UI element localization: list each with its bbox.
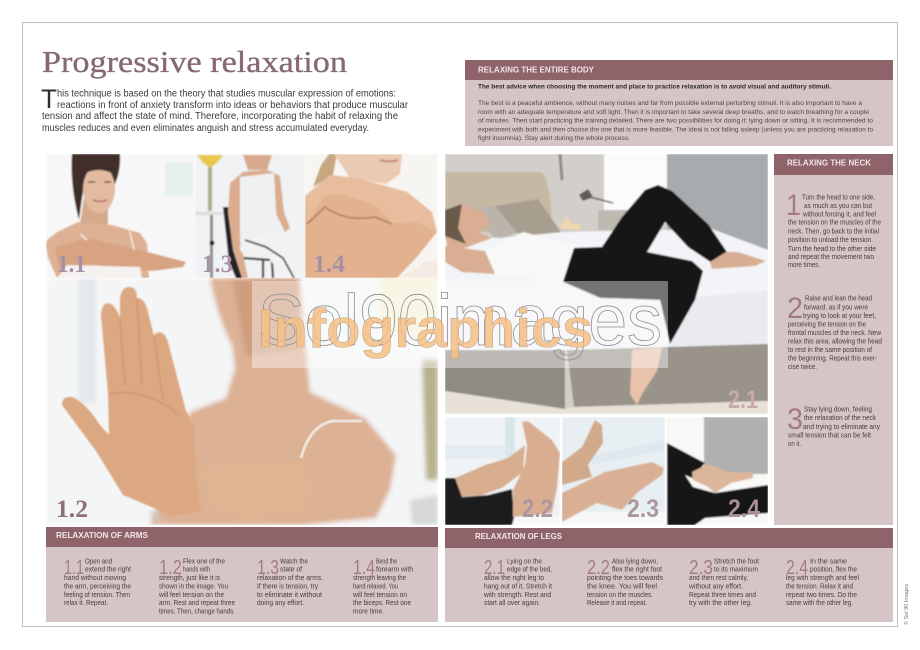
watermark: Infographics	[258, 297, 593, 359]
step 2.1: hang out of it. Stretch it	[484, 582, 552, 590]
step 1	[786, 189, 881, 269]
step 3	[787, 403, 880, 448]
label 2.1: 2.1	[728, 386, 758, 414]
step 1.1: 1.1	[64, 557, 84, 579]
step 2.1: Lying on the	[507, 556, 542, 566]
step 2.1: allow the right leg to	[484, 573, 544, 582]
intro text: T	[41, 84, 57, 114]
step 2: perceiving the tension on the	[788, 320, 866, 328]
step 2.3: without any effort.	[688, 582, 743, 590]
label 1.1: 1.1	[57, 251, 86, 278]
step 1.2	[158, 556, 235, 616]
step 1.3: Watch the	[280, 556, 308, 566]
step 1.3: doing any effort.	[257, 598, 304, 607]
step 1: position to unload the tension.	[788, 235, 873, 244]
step 2	[787, 292, 882, 371]
label 2.3: 2.3	[627, 495, 659, 523]
step 2.1: start all over again.	[484, 598, 540, 607]
step 2.2: the knee. You will feel	[587, 582, 657, 590]
step 2: 2	[787, 292, 803, 325]
step 1.4: more time.	[353, 606, 384, 616]
step 2.4: same with the other leg.	[786, 598, 853, 607]
step 2.1: edge of the bed,	[507, 565, 552, 574]
step 1.2: times. Then, change hands.	[159, 606, 235, 616]
step 1.1: extend the right	[85, 565, 131, 574]
intro text: reactions in front of anxiety transform into ideas or behaviors that produce muscular	[57, 100, 409, 111]
photo 1.2: hand held toward the camera	[46, 278, 438, 525]
step 2.2: tension on the muscles.	[587, 590, 653, 599]
intro text: muscles reduces and even eliminates anguish and stress accumulated everyday.	[42, 123, 369, 134]
credit: © Sol 90 Images	[903, 583, 910, 625]
step 1.3: relaxation of the arms.	[257, 573, 323, 582]
step 1.4: the biceps. Rest one	[353, 598, 411, 607]
panel: relaxing the neck	[774, 154, 893, 525]
step 2.2	[587, 556, 663, 607]
heading: neck: RELAXING THE NECK	[787, 158, 872, 168]
panel: relaxing the entire body	[465, 60, 893, 146]
heading: legs: RELAXATION OF LEGS	[475, 531, 562, 541]
body text: The best is a peaceful ambience, without many noises and far from possible external perturbing stimuli. It is also important to have a	[478, 100, 862, 107]
step 3: the relaxation of the neck	[804, 413, 876, 422]
step 2.4: In the same	[810, 556, 847, 566]
step 1.2: Flex one of the	[183, 556, 225, 566]
step 1.1: Open and	[85, 556, 112, 566]
step 2.3	[688, 556, 759, 607]
step 3: on it.	[788, 439, 801, 448]
step 2: the beginning. Repeat this exer-	[788, 354, 878, 362]
step 2: relax this area, allowing the head	[788, 336, 882, 346]
step 2.4: 2.4	[786, 557, 808, 579]
title: Progressive relaxation	[42, 44, 348, 79]
step 1: neck. Then, go back to the initial	[788, 226, 879, 235]
step 1.3: state of	[280, 565, 302, 574]
step 1: as much as you can but	[804, 201, 872, 210]
step 2.4: position, flex the	[810, 565, 857, 574]
step 2.1: 2.1	[484, 557, 505, 579]
step 1.4: forearm with	[376, 565, 413, 574]
body text: room with an adequate temperature and soft light. Then it is important to take several deep breaths, and to watch breathing for a couple	[478, 109, 869, 116]
step 1: more times.	[788, 260, 820, 269]
step 2.4	[786, 556, 859, 607]
step 2.2: flex the right foot	[612, 565, 662, 574]
strap	[301, 421, 362, 458]
step 3: small tension that can be felt	[788, 430, 871, 440]
heading: entire body: RELAXING THE ENTIRE BODY	[478, 64, 594, 74]
step 2.4: the tension. Relax it and	[786, 582, 853, 590]
step 2.1	[483, 556, 552, 607]
intro text: tension and affect the state of mind. Therefore, incorporating the habit of relaxing the	[42, 111, 398, 122]
step 1: and repeat the movement two	[788, 252, 874, 261]
step 1.4: Bend the	[376, 556, 397, 566]
heading: arms: RELAXATION OF ARMS	[56, 530, 148, 540]
step 1.4: 1.4	[353, 557, 375, 579]
photo 1.1: woman extending arm	[46, 154, 195, 278]
step 3: Stay lying down, feeling	[804, 404, 872, 414]
photo 2.3: foot stretched	[562, 417, 665, 525]
photo 1.3: woman seated	[195, 154, 305, 278]
watermark: Sol90images	[258, 281, 662, 361]
body text: fight insomnia). Stay alert during the whole process.	[478, 135, 630, 142]
step 2.3: to its maximum	[714, 565, 758, 574]
step 1.3: to eliminate it without	[257, 590, 322, 599]
step 1.1: relax it. Repeat.	[64, 598, 108, 607]
step 2.4: leg with strength and feel	[786, 573, 859, 582]
step 2.3: and then rest calmly,	[689, 573, 748, 582]
intro text: his technique is based on the theory that studies muscular expression of emotions:	[57, 89, 396, 100]
step 1.3: If there is tension, try	[257, 582, 318, 590]
step 2.2: Release it and repeat.	[587, 598, 647, 607]
photo 1.4: flexed arm	[305, 154, 438, 278]
step 3: 3	[787, 403, 803, 436]
intro text	[41, 84, 409, 134]
step 1: Turn the head to one side,	[802, 192, 875, 202]
step 2.2: Also lying down,	[612, 556, 658, 566]
step 1: without forcing it, and feel	[802, 210, 876, 218]
step 1: the tension on the muscles of the	[788, 218, 881, 227]
step 2: cise twice.	[788, 362, 817, 371]
body text: experiment with both and then choose the one that is more feasible. The ideal is not falling asleep (unless you are practicing relaxation to	[478, 126, 873, 134]
step 1.3	[257, 556, 323, 607]
step 2.3: try with the other leg.	[689, 598, 752, 607]
step 1.2: shown in the image. You	[159, 582, 228, 590]
step 1: Turn the head to the other side	[788, 244, 876, 253]
step 2: Raise and lean the head	[805, 294, 872, 302]
step 1.1	[64, 556, 131, 607]
photo 2.4: leg flexed with strength	[666, 417, 768, 525]
step 2: to rest in the same position of	[788, 345, 872, 354]
step 1.2: 1.2	[159, 557, 182, 579]
step 2.2: 2.2	[587, 557, 610, 579]
step 1.3: 1.3	[257, 557, 279, 579]
photo 2.1: lying on the edge of the bed	[445, 154, 768, 414]
step 1: 1	[786, 189, 801, 222]
step 1.4: hand relaxed. You	[353, 582, 398, 590]
step 1.4: will feel tension on	[352, 590, 407, 599]
panel: relaxation of legs	[445, 528, 893, 622]
step 1.4	[352, 556, 413, 616]
icon: open hand	[62, 287, 201, 516]
step 2.3: Stretch the foot	[714, 556, 759, 566]
step 1.1: hand without moving	[64, 573, 126, 582]
step 2.2: pointing the toes towards	[587, 573, 663, 582]
step 2: forward, as if you were	[804, 302, 868, 311]
step 1.1: the arm, perceiving the	[64, 582, 131, 590]
step 2.4: repeat two times. Do the	[786, 590, 857, 599]
body text: of minutes. Then start practicing the training detailed. There are two possibilities for doing it: lying down or sitting. It is recommended to	[478, 118, 873, 125]
label 2.2: 2.2	[522, 495, 553, 523]
step 1.2: will feel tension on the	[158, 590, 224, 599]
step 1.4: strength leaving the	[353, 573, 406, 582]
label 1.3: 1.3	[202, 251, 233, 278]
step 1.2: strength, just like it is	[159, 573, 220, 582]
step 1.2: arm. Rest and repeat three	[159, 598, 235, 607]
step 2: frontal muscles of the neck. New	[788, 328, 882, 337]
lead sentence: The best advice when choosing the moment and place to practice relaxation is to avoid visual and auditory stimuli.	[478, 84, 831, 91]
step 2.3: 2.3	[689, 557, 713, 579]
step 1.1: feeling of tension. Then	[64, 590, 130, 599]
body text	[478, 100, 873, 142]
label 2.4: 2.4	[728, 495, 760, 523]
panel: relaxation of arms	[46, 527, 438, 622]
step 3: and trying to eliminate any	[803, 422, 880, 431]
label 1.2: 1.2	[56, 496, 88, 523]
step 2.1: with strength. Rest and	[483, 590, 551, 599]
photo 2.2: right foot flexed	[445, 417, 560, 525]
label 1.4: 1.4	[313, 251, 346, 278]
step 2.3: Repeat three times and	[689, 590, 756, 599]
step 2: trying to look at your feet,	[803, 311, 876, 320]
step 1.2: hands with	[183, 565, 210, 574]
